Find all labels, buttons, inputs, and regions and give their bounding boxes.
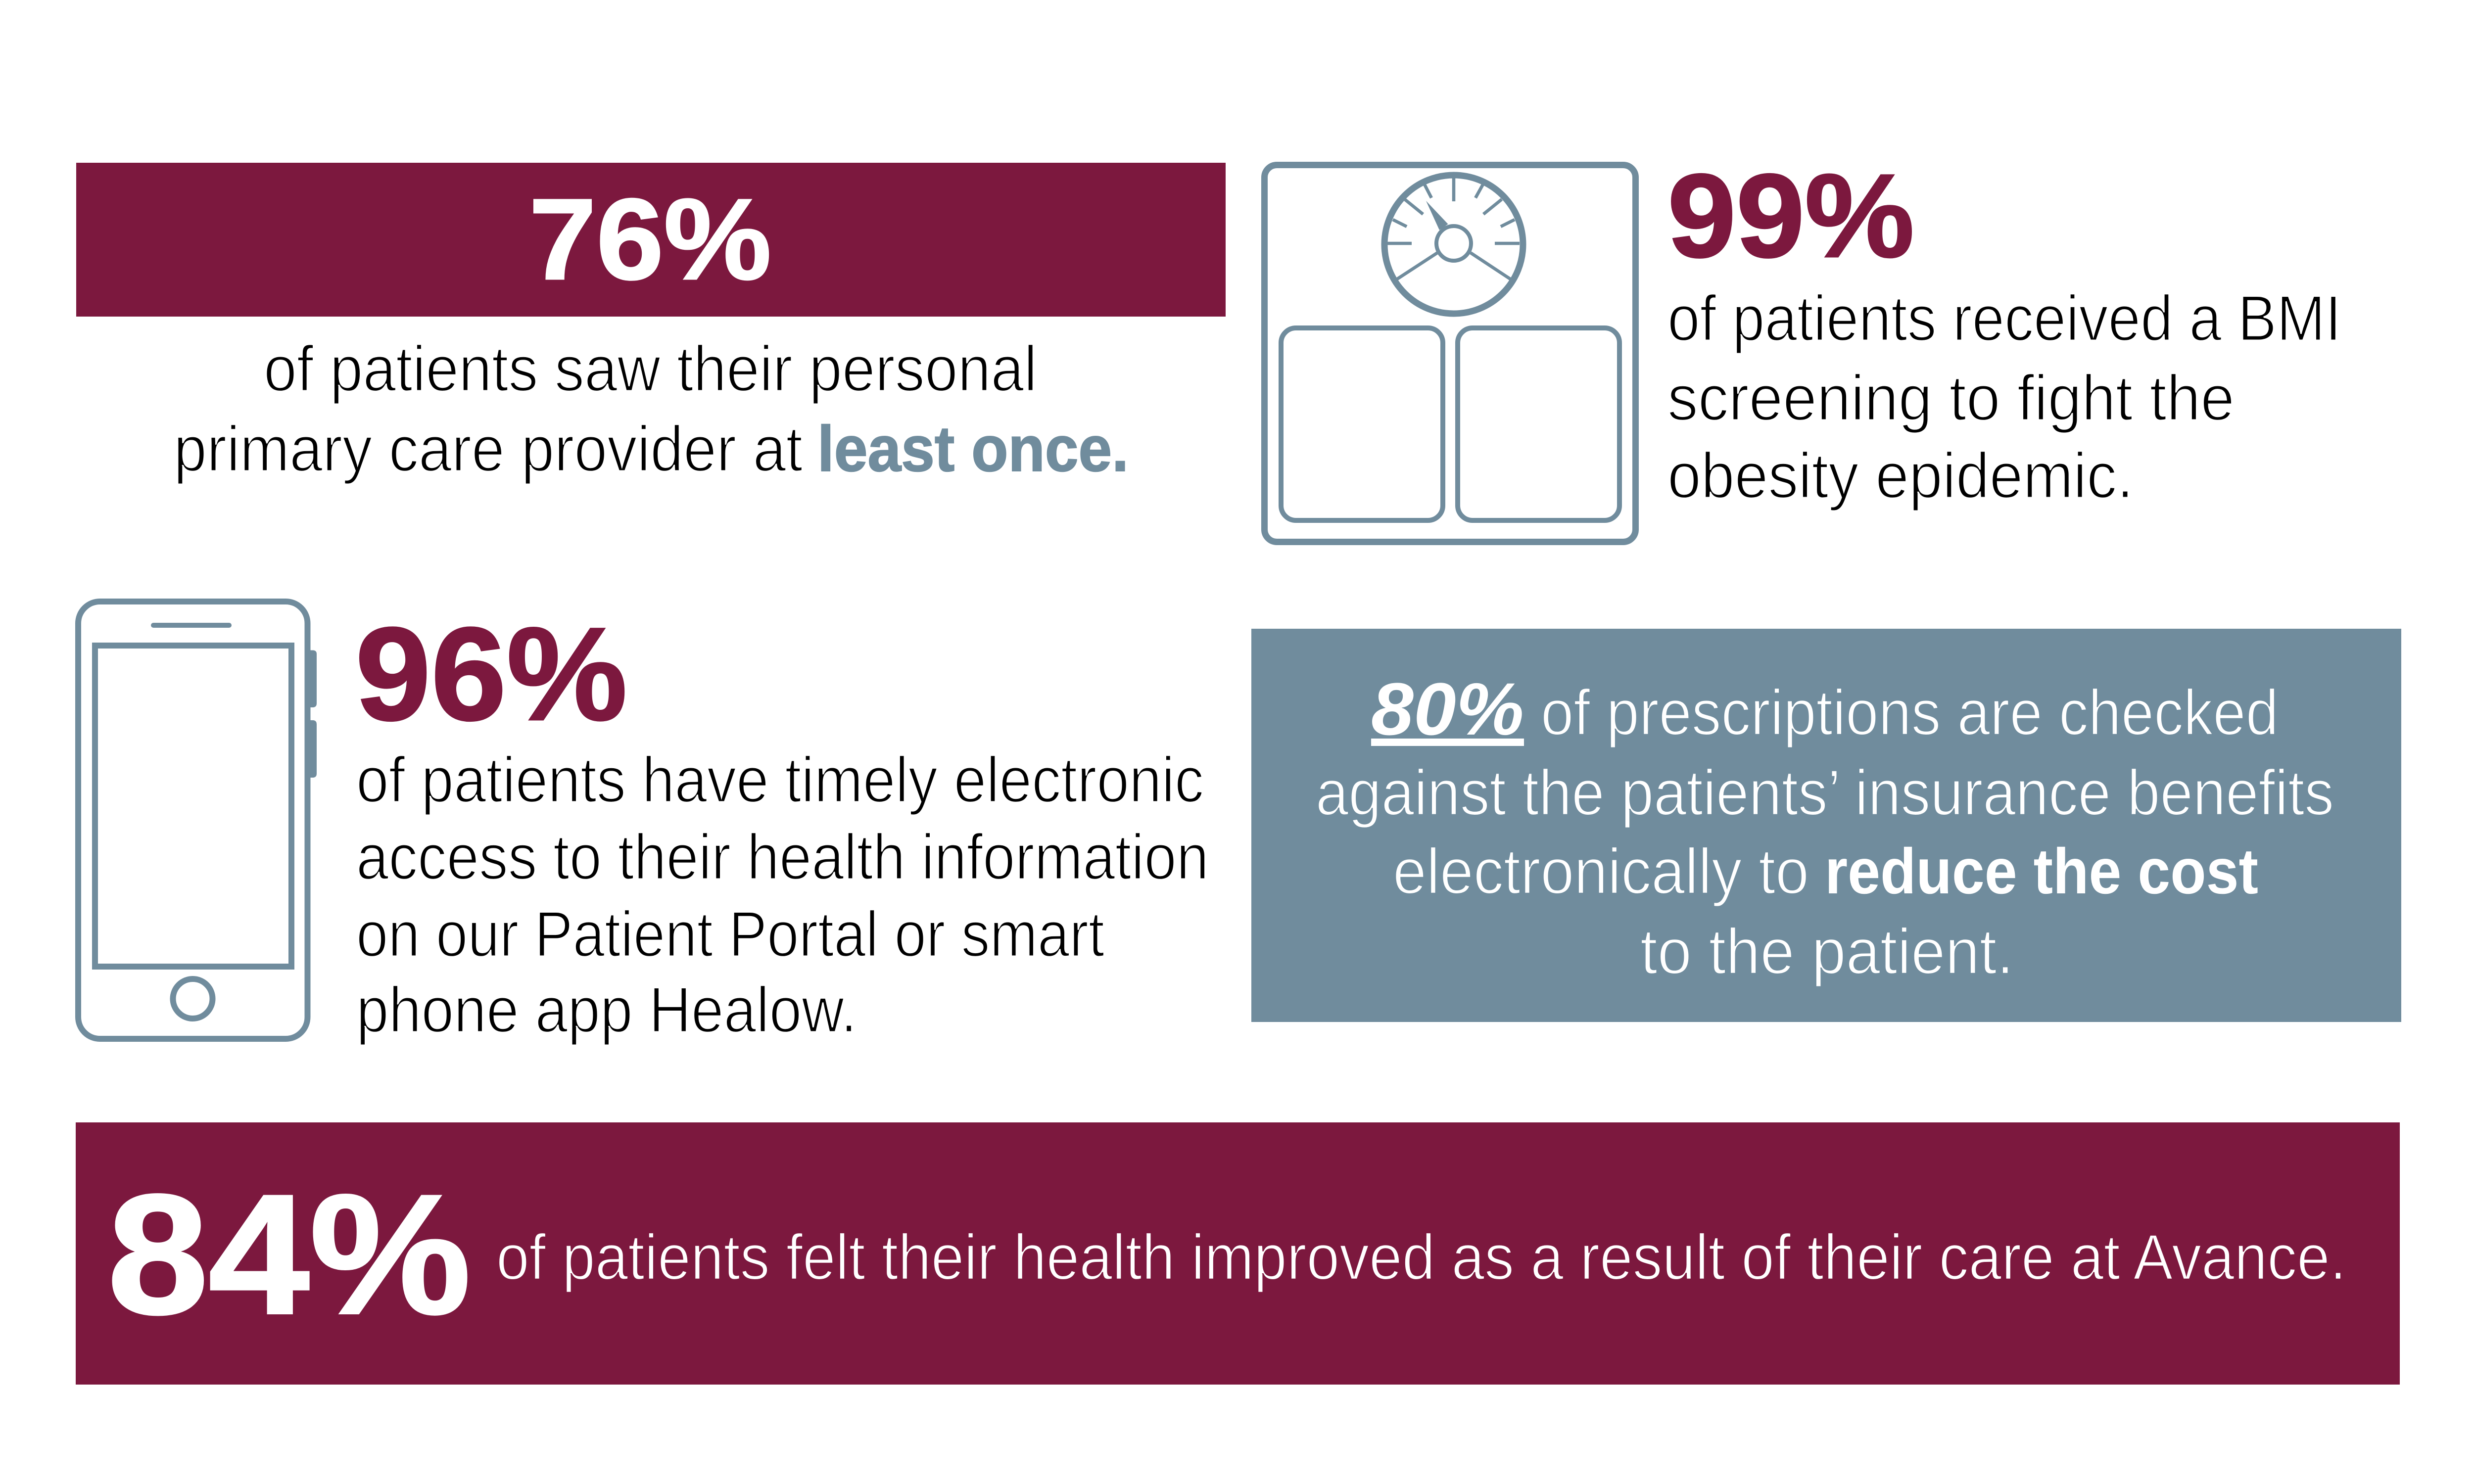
text: BMI screening description: of patients received a BMI [1667,282,2341,354]
text: electronic access description: phone app Healow. [356,974,857,1046]
banner: 76% [76,163,1226,317]
text: electronic access description: on our Patient Portal or smart [356,898,1104,970]
icon: smartphone [78,602,317,1039]
heading: 84%: 84% [107,1159,471,1350]
text: health improved description: of patients felt their health improved as a result of their care at Avance. [496,1221,2346,1293]
panel: 99% stat [1667,149,2341,511]
text: prescriptions description: to the patient. [1640,915,2014,987]
text: prescriptions description: against the patients’ insurance benefits [1316,756,2334,829]
text: electronic access description: of patients have timely electronic [356,743,1204,816]
panel: 80% prescriptions callout [1251,629,2401,1022]
text: prescriptions description [1316,676,2334,987]
text: prescriptions description: reduce the cost [1825,835,2258,907]
text: electronic access description: access to their health information [356,821,1209,893]
heading: 99%: 99% [1667,149,1914,282]
heading: 96%: 96% [355,600,627,748]
text: BMI screening description: screening to fight the [1667,362,2235,434]
text: primary care provider description: primary care provider at [174,413,803,485]
icon: bathroom scale [1265,165,1636,542]
panel: 96% stat [355,600,1209,1046]
panel: 84% stat banner [76,1122,2400,1385]
banner: 76%: 76% [529,175,771,304]
text: 80% figure: 80% [1371,667,1524,750]
text: primary care provider description: least once. [817,413,1129,485]
text: primary care provider description [174,332,1129,485]
text: prescriptions description: electronically to [1393,835,1809,907]
text: BMI screening description [1667,282,2341,511]
text: electronic access description [356,743,1209,1046]
panel: 76% stat [76,163,1226,485]
text: prescriptions description: of prescriptions are checked [1541,676,2279,748]
text: BMI screening description: obesity epidemic. [1667,439,2134,511]
text: primary care provider description: of patients saw their personal [264,332,1037,405]
